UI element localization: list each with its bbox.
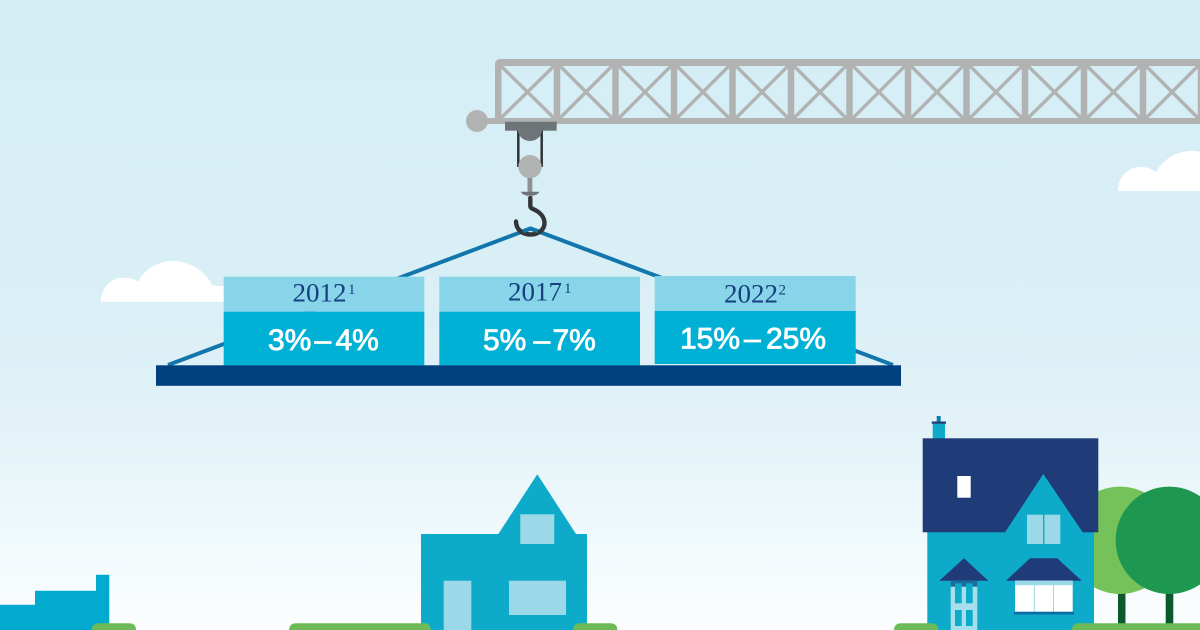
footnote 1: 1	[348, 282, 356, 298]
tree: dark green	[1116, 487, 1200, 624]
range 5%-7%: 7%	[552, 324, 596, 357]
sling cables	[168, 228, 893, 365]
chimney	[932, 416, 946, 439]
block: 2017	[439, 277, 640, 365]
pulley assembly	[505, 122, 557, 199]
sling apex over hook	[523, 228, 538, 231]
year label 2017: 2017	[508, 278, 562, 306]
tree: light green	[1066, 487, 1174, 624]
year label 2022: 2022	[724, 279, 778, 308]
bay window	[1014, 581, 1074, 614]
bay window roof	[1006, 558, 1082, 581]
footnote 2: 2	[778, 282, 786, 298]
gable	[1005, 474, 1083, 540]
range 15%-25%: 15%	[680, 322, 740, 355]
roof window	[957, 476, 971, 498]
platform	[156, 365, 901, 386]
gable window	[1027, 515, 1060, 544]
large house	[923, 416, 1098, 630]
crane hook	[516, 198, 544, 234]
range 5%-7%: 5%	[483, 324, 526, 357]
range 3%-4%: 3%	[268, 324, 311, 357]
range 5%-7%: –	[534, 324, 550, 357]
year label 2012: 2012	[292, 278, 346, 308]
small house	[421, 474, 587, 630]
crane jib truss	[477, 59, 1200, 124]
ground: grass strips	[92, 623, 1200, 630]
skyline stepped building	[0, 575, 109, 630]
block: 2012	[224, 277, 424, 365]
cloud: left	[101, 261, 224, 302]
range 3%-4%: 4%	[336, 324, 379, 357]
door porch roof	[939, 558, 988, 581]
house body	[927, 530, 1094, 630]
crane end pivot	[466, 110, 488, 132]
range 3%-4%: –	[314, 324, 332, 357]
range 15%-25%: –	[744, 322, 761, 355]
block: 2022	[655, 276, 856, 364]
roof	[923, 438, 1098, 532]
footnote 1: 1	[564, 281, 572, 297]
range 15%-25%: 25%	[766, 322, 826, 355]
cloud: right	[1118, 151, 1200, 191]
door	[951, 581, 977, 630]
